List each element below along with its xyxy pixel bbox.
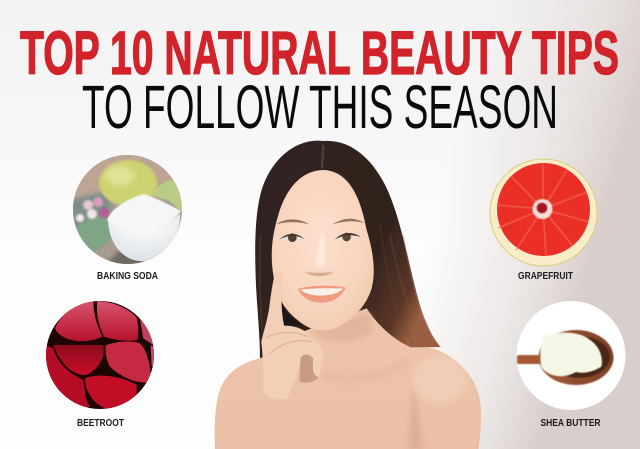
icon: whole lime bbox=[99, 160, 157, 206]
label: GRAPEFRUIT bbox=[518, 271, 573, 282]
teeth bbox=[300, 288, 343, 296]
icon: grapefruit rind bbox=[490, 158, 598, 266]
icon: wooden spoon bbox=[517, 330, 614, 385]
chest shading bbox=[313, 312, 467, 449]
photo: smiling woman bbox=[215, 141, 481, 449]
icon: powder mound bbox=[107, 194, 181, 231]
nose highlight and shadow bbox=[305, 235, 334, 276]
shoulders and chest bbox=[215, 308, 481, 449]
lips bbox=[298, 286, 346, 303]
icon: segment lines bbox=[497, 163, 589, 255]
panel: grapefruit bbox=[490, 158, 598, 282]
icon: white bowl bbox=[108, 214, 180, 261]
icon: green leaf bbox=[76, 216, 112, 253]
panel: baking soda bbox=[73, 155, 182, 279]
icon: grapefruit core bbox=[532, 199, 552, 219]
hair bbox=[255, 141, 441, 365]
face bbox=[272, 170, 374, 330]
icon: shea butter scoop bbox=[540, 333, 602, 376]
icon: grapefruit flesh bbox=[497, 163, 590, 256]
white circle backdrop bbox=[516, 301, 626, 410]
hair strands bbox=[260, 145, 434, 343]
panel: beetroot bbox=[43, 299, 156, 429]
label: SHEA BUTTER bbox=[540, 418, 601, 429]
dark hair gap beside jaw bbox=[281, 303, 301, 326]
left eye bbox=[279, 233, 305, 242]
panel: shea butter bbox=[516, 301, 626, 429]
photo circle: beetroot slices bbox=[43, 299, 156, 411]
label: BAKING SODA bbox=[97, 271, 158, 282]
hand with raised finger bbox=[261, 271, 323, 400]
label: BEETROOT bbox=[77, 418, 124, 429]
right eyebrow bbox=[333, 219, 365, 224]
finger creases bbox=[265, 332, 312, 355]
right eye bbox=[335, 233, 361, 241]
icon: lime slice bbox=[152, 180, 182, 212]
photo circle: baking soda bbox=[73, 155, 182, 264]
icon: pink flowers bbox=[76, 197, 109, 222]
icon: beet slices bbox=[43, 301, 155, 408]
left eyebrow bbox=[276, 219, 309, 224]
gap between hand and neck bbox=[299, 354, 318, 383]
